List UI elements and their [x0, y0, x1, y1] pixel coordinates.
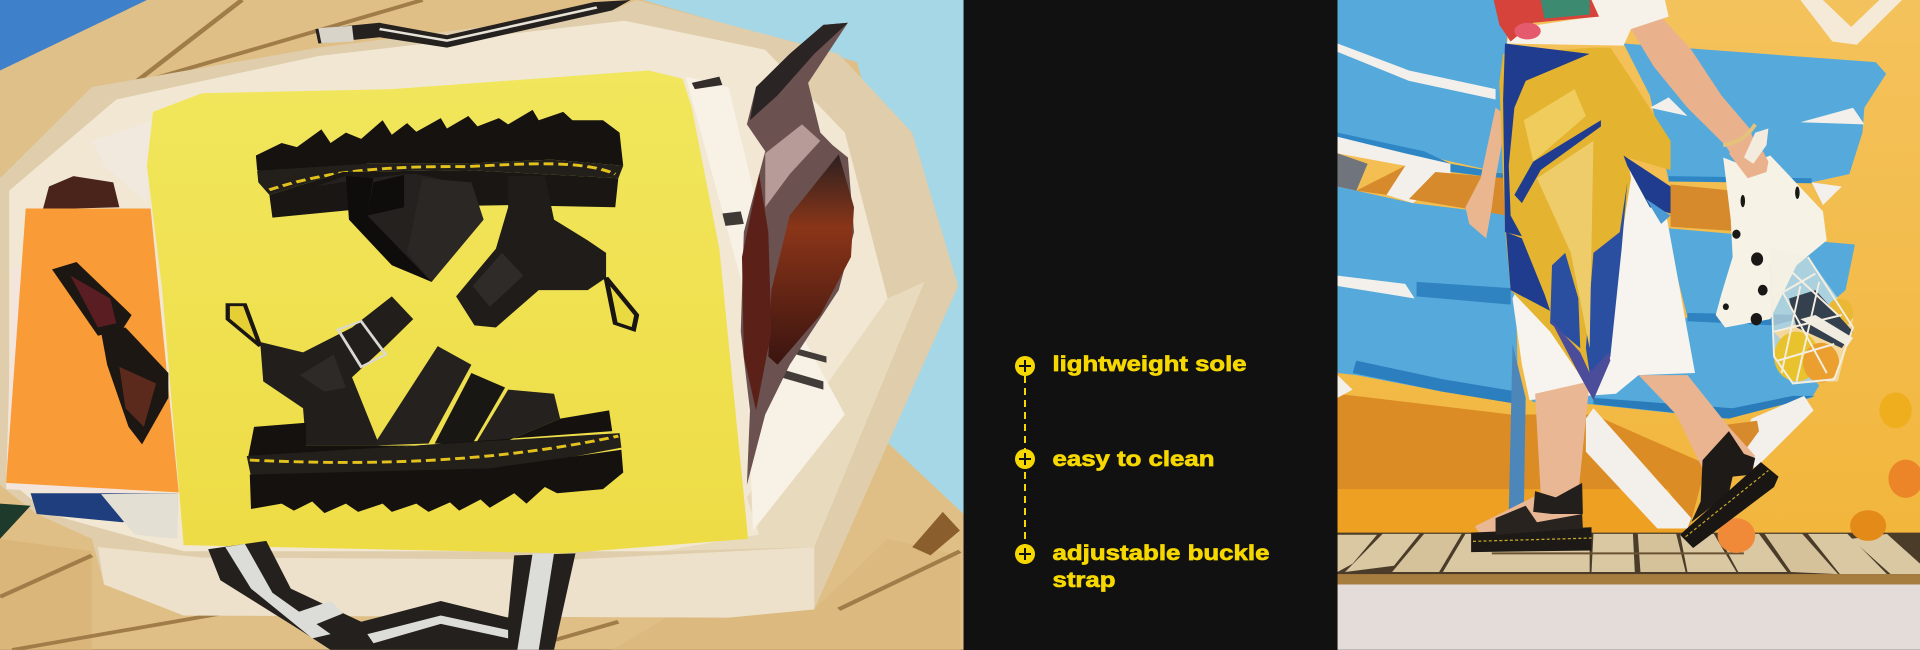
white lounger frames — [1338, 44, 1864, 528]
panel: model walking photo — [1330, 0, 1920, 650]
label text: easy to clean — [1052, 447, 1214, 471]
fallen oranges — [1718, 393, 1920, 553]
sunglasses — [52, 262, 168, 444]
front straps — [373, 346, 471, 446]
white skirt — [1513, 162, 1695, 400]
tote bag — [0, 0, 958, 618]
panel: bag flat-lay photo — [0, 0, 964, 650]
label text: lightweight sole — [1052, 352, 1247, 376]
back sandal on deck — [1471, 483, 1592, 552]
floral top — [1494, 0, 1599, 41]
model — [1465, 0, 1779, 552]
front arm — [1631, 18, 1753, 152]
wooden bird — [741, 23, 854, 485]
pull loop — [606, 278, 637, 330]
shirt — [1507, 0, 1669, 46]
bracelet — [1723, 124, 1755, 145]
polka dots — [1723, 187, 1800, 325]
wooden deck background — [0, 0, 964, 650]
orange underside shapes and rock — [1338, 153, 1759, 452]
orange notebook — [6, 208, 179, 492]
welt and stitching — [247, 433, 621, 477]
blue item and towel fringe under notebook — [0, 493, 178, 539]
straps — [318, 174, 440, 282]
outsole with teeth — [250, 450, 623, 513]
ankle strap — [260, 296, 413, 446]
lounger leg — [1509, 344, 1526, 514]
feature: adjustable buckle strap — [1015, 541, 1270, 592]
net with oranges — [1770, 249, 1853, 383]
midsole — [269, 170, 618, 218]
panel: black feature list — [964, 0, 1338, 650]
feature: easy to clean — [1015, 447, 1214, 471]
heel strap — [456, 205, 606, 328]
outsole with teeth — [256, 110, 623, 178]
floor — [1338, 584, 1920, 650]
foot on deck — [1475, 493, 1582, 535]
midsole — [248, 410, 612, 458]
label text: adjustable buckle — [1052, 541, 1270, 565]
hand — [1729, 137, 1768, 178]
back arm and hand — [1466, 108, 1502, 238]
white folded clothes — [686, 77, 845, 531]
raised front sandal — [1680, 431, 1779, 548]
buckle — [338, 321, 386, 367]
bottom bag handle — [208, 541, 575, 650]
bottle — [43, 176, 119, 209]
blue sun loungers — [1338, 0, 1886, 419]
sandal: bottom, upright — [228, 296, 623, 513]
painted backdrop — [1330, 0, 1920, 539]
icon: plus marker — [1015, 449, 1035, 469]
sandal: top, inverted — [256, 110, 637, 330]
label text — [1052, 541, 1270, 592]
pull loop — [228, 305, 260, 346]
label text: strap — [1052, 568, 1116, 592]
icon: plus marker — [1015, 356, 1035, 376]
top bag handle — [315, 0, 631, 48]
polka dot tote and net bag — [1716, 128, 1853, 383]
legs — [1535, 381, 1590, 493]
scarf — [1499, 44, 1671, 400]
welt and stitching — [257, 160, 623, 195]
deck planks — [1338, 533, 1920, 584]
icon: plus marker — [1015, 544, 1035, 564]
dashed connector line — [1024, 376, 1026, 546]
yellow towel — [147, 70, 748, 553]
feature: lightweight sole — [1015, 352, 1247, 376]
